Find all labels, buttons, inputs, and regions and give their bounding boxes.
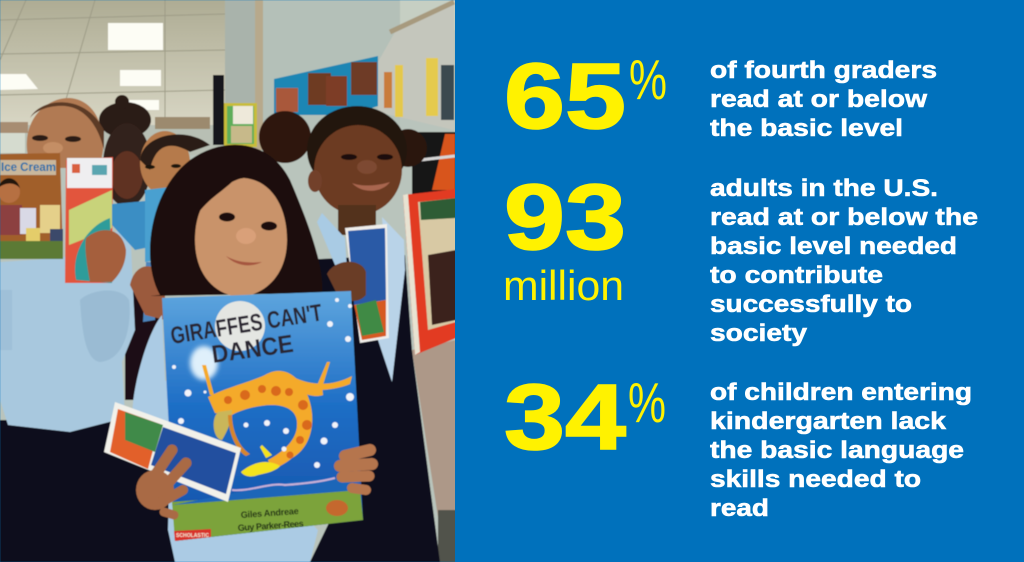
description: [710, 57, 937, 142]
bookmark in front of book: [104, 402, 241, 502]
ceiling lights: [0, 23, 163, 110]
center girl's face: [190, 169, 287, 297]
center girl's right hand: [340, 450, 372, 490]
moon: [215, 301, 265, 351]
description: of children entering: [710, 379, 972, 406]
right child's collar and blouse: [317, 213, 405, 382]
center girl's blouse: [133, 315, 318, 562]
bookmark held by left child: [65, 157, 113, 283]
Giraffes Can't Dance book: [162, 291, 363, 541]
description: [710, 175, 978, 347]
photo: children holding books: [0, 0, 456, 562]
giraffe: [202, 362, 352, 476]
number: 65: 65: [504, 44, 626, 148]
percent sign: %: [629, 48, 667, 112]
book title: GIRAFFES CAN'T: [169, 299, 324, 350]
dark pants and jumpers: [0, 255, 456, 562]
glare: [190, 346, 218, 380]
stars: [172, 298, 354, 468]
child peeking in the middle: [140, 131, 210, 195]
publisher logo: [174, 529, 211, 541]
authors: [237, 506, 304, 533]
description: society: [710, 320, 808, 347]
small book and blue card behind the girl: [112, 187, 170, 322]
description: of fourth graders: [710, 57, 937, 84]
blue panel: [455, 0, 1024, 562]
rock: [326, 500, 348, 516]
description: adults in the U.S.: [710, 175, 938, 202]
center girl's left hand: [136, 450, 186, 515]
Ice Cream book: Ice Cream: [1, 162, 56, 174]
center girl's hair: [150, 145, 322, 296]
right child's bookmark: [345, 224, 389, 343]
stat: 93 million adults: [503, 165, 978, 347]
description: the basic level: [710, 115, 903, 142]
description: read: [710, 495, 769, 522]
description: to contribute: [710, 262, 883, 289]
description: basic level needed: [710, 233, 957, 260]
authors: Guy Parker-Rees: [237, 518, 304, 533]
left child's head: [27, 98, 104, 168]
red book on the right: [403, 189, 456, 355]
description: skills needed to: [710, 466, 921, 493]
description: read at or below: [710, 86, 927, 113]
publisher logo: SCHOLASTIC: [176, 533, 209, 539]
number: 34: 34: [504, 365, 626, 469]
description: successfully to: [710, 291, 912, 318]
Ice Cream book: [0, 153, 63, 259]
number: 93: 93: [504, 165, 626, 269]
right child's face: [308, 125, 402, 235]
back child on the left: [99, 95, 151, 207]
left child's shirt: [0, 225, 135, 432]
book title: [169, 299, 324, 369]
description: read at or below the: [710, 204, 978, 231]
right child's hand: [327, 262, 366, 301]
description: the basic language: [710, 437, 964, 464]
right child's hair and pigtails: [259, 106, 427, 194]
bulletin board poster: [274, 56, 378, 115]
description: kindergarten lack: [710, 408, 947, 435]
classroom background: [0, 0, 456, 562]
post and wall poster: [213, 75, 257, 147]
left child's hand: [85, 230, 126, 282]
percent sign: %: [628, 371, 666, 435]
stat: 65% of fourth graders: [504, 44, 937, 148]
shelf with plastic bags: [378, 2, 456, 204]
description: [710, 379, 972, 522]
unit: million: million: [503, 262, 624, 309]
stat: 34% of children: [504, 365, 972, 522]
ground: [172, 488, 363, 541]
book title: DANCE: [210, 330, 295, 369]
authors: Giles Andreae: [240, 506, 299, 520]
